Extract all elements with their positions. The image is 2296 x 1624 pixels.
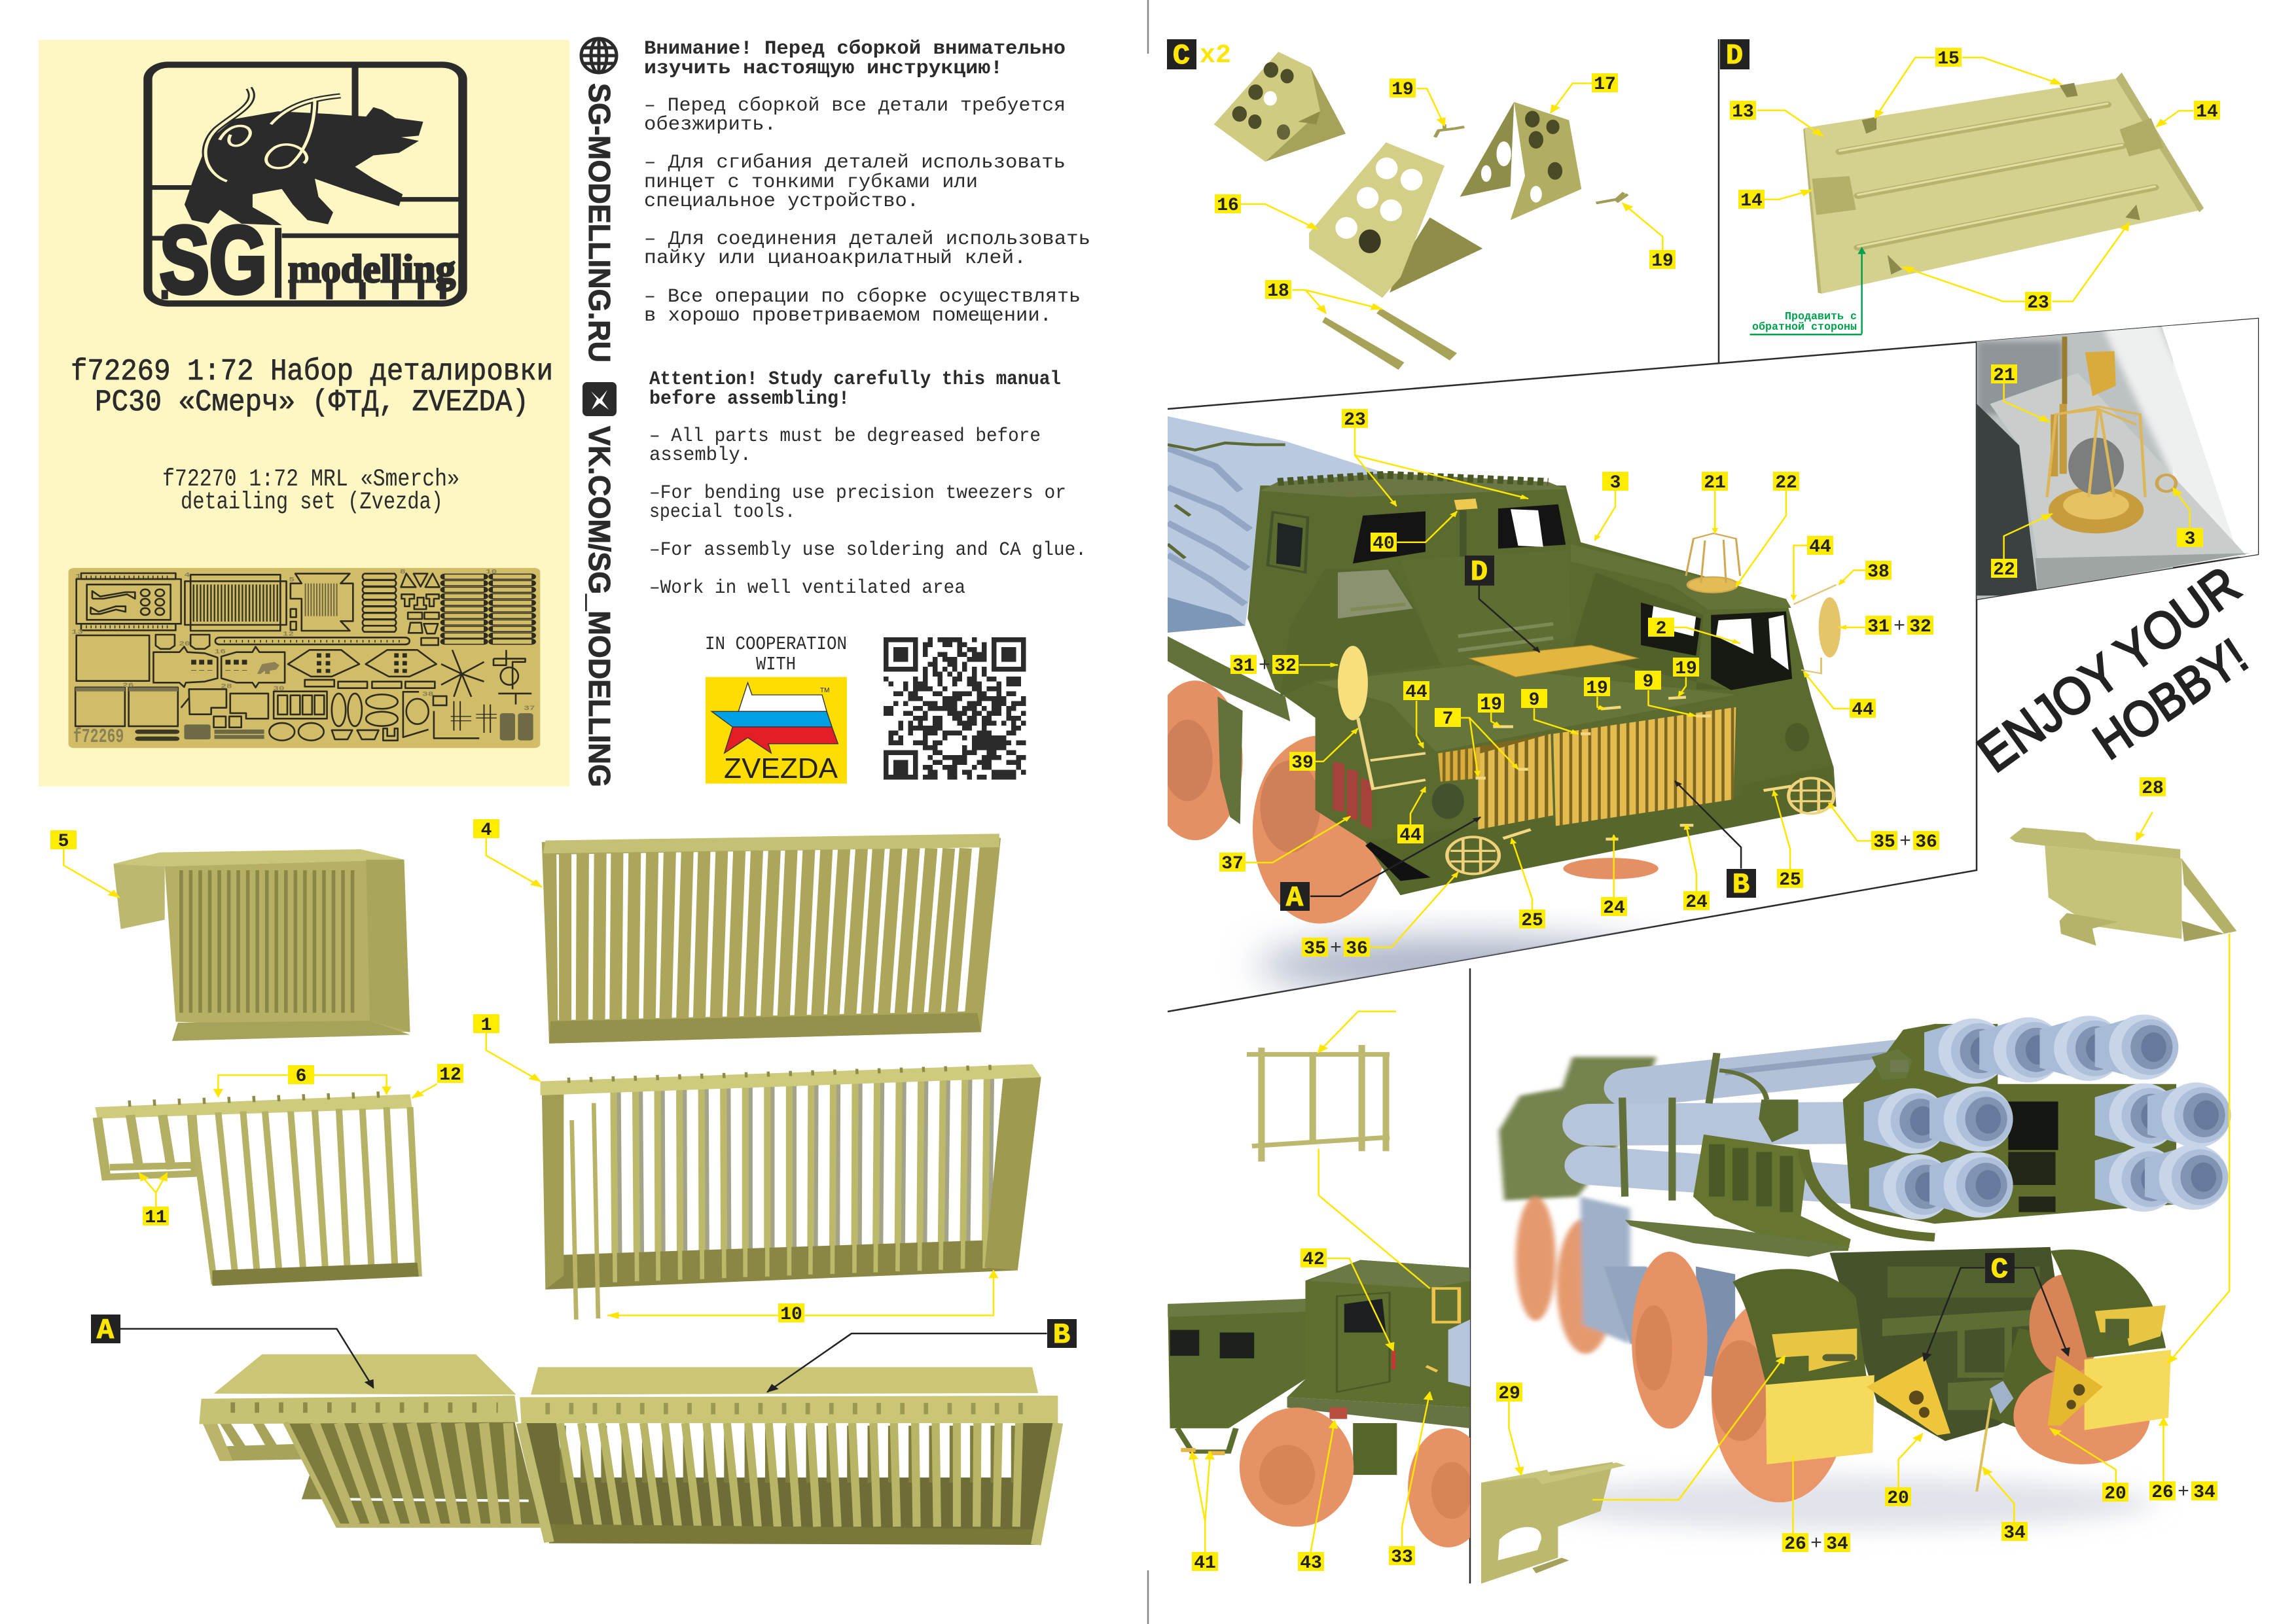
ladder and platform xyxy=(1625,1099,1935,1257)
label 44: 44 xyxy=(1852,700,1874,720)
part 29 xyxy=(1481,1462,1625,1583)
label 14: 14 xyxy=(2196,102,2218,122)
marker A on truck: A xyxy=(1286,882,1304,915)
part 1: outer frame xyxy=(541,1064,1041,1320)
title russian: f72269 1:72 Набор деталировки xyxy=(71,355,553,389)
label 26 + 34 right xyxy=(2149,1481,2217,1504)
photo-etched fret: f72269 xyxy=(73,726,124,749)
label 3 xyxy=(1602,472,1628,493)
cooperation caption: IN COOPERATION xyxy=(705,633,847,655)
lamp cage xyxy=(1686,533,1740,593)
logo: SG modelling sprue bear: modelling xyxy=(288,247,456,291)
text block: russian instructions: – Все операции по сборке осуществлять xyxy=(644,286,1081,308)
label 13: 13 xyxy=(1732,102,1754,122)
label 37: 37 xyxy=(1221,854,1244,874)
subtitle english: detailing set (Zvezda) xyxy=(181,489,443,516)
text block: russian instructions: изучить настоящую инструкцию! xyxy=(644,58,1003,80)
label 31 + 32 left: 32 xyxy=(1274,656,1297,677)
label 16: 16 xyxy=(1217,196,1239,216)
label 5 xyxy=(50,830,77,852)
photo-etched fret: 28 xyxy=(221,683,232,690)
label 42: 42 xyxy=(1302,1250,1325,1270)
label 35 + 36 right: 35 xyxy=(1873,832,1895,853)
label 25: 25 xyxy=(1779,870,1801,891)
photo-etched fret: 5 xyxy=(289,576,295,584)
note: push from the back xyxy=(1752,311,1857,334)
callouts: side truck xyxy=(1192,1012,1430,1553)
icon: globe xyxy=(581,39,617,73)
part 18 rails xyxy=(1322,308,1457,370)
photo-etched fret: 13 xyxy=(71,628,83,636)
launcher frame xyxy=(1843,1024,2176,1224)
label 44: 44 xyxy=(1809,537,1831,557)
marker B on truck: B xyxy=(1732,869,1749,902)
panel: rear truck photo xyxy=(1499,1015,2231,1530)
label 14: 14 xyxy=(1740,191,1763,211)
label 44: 44 xyxy=(1405,682,1427,703)
hood and front cab body xyxy=(1280,544,1837,895)
label 21: 21 xyxy=(1993,366,2015,386)
label 19: 19 xyxy=(1391,80,1414,100)
photo-etched fret: 16 xyxy=(215,648,226,656)
photo-etched fret: 12 xyxy=(283,631,294,638)
label 34: 34 xyxy=(2003,1523,2026,1544)
label 6 xyxy=(288,1065,314,1087)
label 35 + 36 right: + xyxy=(1899,831,1911,853)
cooperation caption xyxy=(705,633,847,675)
photo-etched fret: 26 xyxy=(122,682,134,689)
marker C xyxy=(1167,39,1196,73)
panel: loose parts 28 and 29 with callouts xyxy=(1481,812,2236,1583)
label 9 xyxy=(1635,671,1661,692)
label 6: 6 xyxy=(296,1067,306,1087)
tow hook and chain xyxy=(1977,1381,2013,1492)
photo-etched fret: 10 xyxy=(486,569,497,576)
callouts: front truck xyxy=(1245,428,1873,947)
chassis deck and strut xyxy=(1168,636,1290,824)
panel: cover with logo, title and fret xyxy=(39,40,569,786)
label 26 + 34 left: 34 xyxy=(1826,1534,1848,1555)
label 23: 23 xyxy=(2027,293,2049,313)
label 3 xyxy=(2177,528,2203,550)
qr code xyxy=(884,640,1026,777)
fenders xyxy=(1732,1250,2166,1386)
marker C on truck xyxy=(1985,1253,2015,1286)
photo-etched fret xyxy=(69,568,540,749)
part 28 xyxy=(2010,828,2236,945)
small PE details xyxy=(1475,697,1791,839)
label 1: 1 xyxy=(481,1015,492,1036)
label 9 xyxy=(1521,689,1547,711)
part 19 small right xyxy=(1596,192,1628,203)
zvezda logo: TM xyxy=(820,687,829,694)
zvezda logo xyxy=(706,677,847,785)
text block: english instructions: –For bending use precision tweezers or xyxy=(649,482,1066,504)
label 18: 18 xyxy=(1267,281,1289,302)
label 26 + 34 right: + xyxy=(2178,1481,2189,1504)
label 41: 41 xyxy=(1194,1553,1216,1574)
side cab xyxy=(1168,1260,1470,1475)
label 11: 11 xyxy=(145,1208,167,1228)
label 44: 44 xyxy=(1399,826,1422,846)
label 24: 24 xyxy=(1603,898,1625,919)
slogan: enjoy your hobby: ENJOY YOUR xyxy=(1967,555,2250,783)
label 26 + 34 left: 26 xyxy=(1784,1534,1806,1555)
red vents xyxy=(1333,762,1372,830)
part 4: front radiator grille xyxy=(542,834,1001,1044)
text block: english instructions xyxy=(649,368,1086,599)
label 25: 25 xyxy=(1521,911,1543,931)
text block: english instructions: –For assembly use soldering and CA glue. xyxy=(649,539,1086,561)
text block: english instructions: special tools. xyxy=(649,501,795,523)
text block: russian instructions: в хорошо проветриваемом помещении. xyxy=(644,305,1052,327)
text block: russian instructions: пайку или цианоакрилатный клей. xyxy=(644,247,1026,270)
callouts: C and D xyxy=(1241,58,2193,313)
part 19 small xyxy=(1435,124,1464,137)
note: push from the back: обратной стороны xyxy=(1752,321,1857,334)
truck silhouette base xyxy=(1247,485,1837,895)
panel: C and D parts xyxy=(1214,52,2204,370)
marker A xyxy=(91,1315,120,1347)
cooperation caption: WITH xyxy=(756,654,796,675)
part 6: side frame xyxy=(95,1094,419,1286)
logo: SG modelling sprue bear xyxy=(148,65,463,313)
panel: left side truck photo xyxy=(1168,1012,1488,1553)
label 9: 9 xyxy=(1643,672,1653,692)
label 38: 38 xyxy=(1867,562,1890,582)
label 3: 3 xyxy=(1610,473,1621,493)
marker D on truck xyxy=(1465,556,1494,589)
gold triangles xyxy=(1867,1356,2103,1436)
label 35 + 36 right xyxy=(1871,831,1939,853)
plate D on hood xyxy=(1469,645,1638,677)
subtitle english: f72270 1:72 MRL «Smerch» xyxy=(162,466,459,493)
label 29: 29 xyxy=(1498,1384,1520,1404)
panel: radiator parts assembly page xyxy=(63,834,1058,1545)
label 19: 19 xyxy=(1480,695,1502,715)
label 31 + 32 right: + xyxy=(1893,616,1905,638)
label 26 + 34 right: 34 xyxy=(2193,1483,2215,1503)
assembly A xyxy=(199,1354,541,1526)
zvezda logo: ZVEZDA xyxy=(724,752,838,785)
text block: russian instructions: Внимание! Перед сборкой внимательно xyxy=(644,38,1066,60)
marker A: A xyxy=(97,1315,115,1347)
label 24: 24 xyxy=(1685,892,1708,913)
callouts: rear truck xyxy=(1509,812,2229,1534)
text block: russian instructions: – Для сгибания деталей использовать xyxy=(644,152,1066,174)
label 3: 3 xyxy=(2185,529,2195,550)
gold mudflaps and plates xyxy=(1766,1305,2171,1464)
part 16 xyxy=(1309,143,1482,298)
assembly B xyxy=(520,1367,1058,1545)
label 4 xyxy=(473,819,499,841)
label 26 + 34 left: + xyxy=(1810,1533,1822,1555)
mirrors and arms xyxy=(1338,585,1840,788)
green note xyxy=(1749,247,1862,334)
part 30 rack xyxy=(1247,1045,1390,1161)
label 26 + 34 right: 26 xyxy=(2151,1483,2174,1503)
rocket tubes xyxy=(1591,1053,1919,1201)
marker C on truck: C xyxy=(1991,1254,2008,1286)
text block: russian instructions: – Перед сборкой все детали требуется xyxy=(644,95,1066,117)
photo-etched fret: 37 xyxy=(524,705,535,712)
text block: russian instructions: специальное устройство. xyxy=(644,190,919,213)
label 22: 22 xyxy=(1775,473,1797,493)
part D plate xyxy=(1803,73,2204,294)
rear wheels xyxy=(1147,680,1659,923)
label 43: 43 xyxy=(1300,1553,1322,1574)
photo-etched fret: 20 xyxy=(179,641,190,648)
logo: SG modelling sprue bear: SG xyxy=(160,207,267,313)
label 19: 19 xyxy=(1675,659,1697,679)
label 7 xyxy=(1435,708,1461,730)
label 31 + 32 right xyxy=(1865,616,1933,638)
distant cab and far wheels, blurred xyxy=(1499,1057,1657,1354)
photo-etched fret: 30 xyxy=(273,685,285,692)
text block: russian instructions xyxy=(644,38,1090,327)
label 21: 21 xyxy=(1704,473,1726,493)
label 31 + 32 right: 31 xyxy=(1867,617,1890,637)
text block: english instructions: – All parts must be degreased before xyxy=(649,425,1041,448)
marker D xyxy=(1720,39,1749,73)
marker D on truck: D xyxy=(1471,556,1488,589)
label 39: 39 xyxy=(1291,753,1314,773)
page fold marks and frame lines xyxy=(1148,0,2258,1624)
label 1 xyxy=(473,1014,499,1036)
wheels rear xyxy=(1632,1252,2150,1502)
label 35 + 36 left: 35 xyxy=(1304,939,1326,959)
photo-etched fret: 38 xyxy=(422,690,433,698)
label 5: 5 xyxy=(58,832,69,852)
text block: english instructions: before assembling! xyxy=(649,388,850,410)
label 31 + 32 left xyxy=(1230,655,1299,677)
label 7: 7 xyxy=(1443,709,1453,730)
marker A on truck xyxy=(1280,882,1310,915)
grille B xyxy=(1553,707,1736,826)
title russian: РС30 «Смерч» (ФТД, ZVEZDA) xyxy=(95,385,529,419)
slogan: enjoy your hobby: HOBBY! xyxy=(2084,628,2257,770)
label 33: 33 xyxy=(1391,1547,1413,1568)
label 20: 20 xyxy=(2104,1484,2126,1504)
label 9: 9 xyxy=(1529,690,1539,711)
label 35 + 36 left: 36 xyxy=(1346,939,1368,959)
label 22: 22 xyxy=(1993,560,2015,580)
label 19: 19 xyxy=(1586,679,1608,699)
label 17: 17 xyxy=(1594,75,1616,95)
label 19: 19 xyxy=(1651,251,1674,272)
text block: english instructions: Attention! Study carefully this manual xyxy=(649,368,1061,391)
rockets behind cab xyxy=(1168,416,1386,633)
subtitle english xyxy=(162,466,459,516)
rear cab xyxy=(1260,473,1566,573)
marker C: C xyxy=(1173,40,1190,73)
headlight meshes xyxy=(1447,778,1834,874)
heading: x2: x2 xyxy=(1200,41,1231,71)
photo-etched fret: 1 xyxy=(75,573,81,580)
label 10: 10 xyxy=(780,1305,802,1325)
label 4: 4 xyxy=(481,821,492,841)
label 2: 2 xyxy=(1656,619,1666,639)
photo-etched fret: 8 xyxy=(400,569,406,576)
part 5: small box xyxy=(113,849,410,1041)
marker B: B xyxy=(1053,1319,1070,1352)
label 20: 20 xyxy=(1887,1489,1909,1509)
vk vertical text: VK.COM/SG_MODELLING xyxy=(583,426,617,787)
chassis and rear xyxy=(1604,1247,2072,1441)
label 26 + 34 left xyxy=(1782,1533,1850,1555)
text block: russian instructions: – Для соединения деталей использовать xyxy=(644,228,1090,251)
label 28: 28 xyxy=(2142,779,2164,799)
marker B on truck xyxy=(1727,869,1756,902)
marker B xyxy=(1047,1319,1077,1352)
photo-etched fret: 4 xyxy=(184,572,190,579)
label 40: 40 xyxy=(1372,534,1395,554)
label 2 xyxy=(1648,618,1674,639)
label 35 + 36 left xyxy=(1302,938,1370,960)
label 35 + 36 left: + xyxy=(1330,938,1342,960)
label 23: 23 xyxy=(1344,410,1366,431)
rocket heads xyxy=(1864,1015,2231,1220)
text block: russian instructions: пинцет с тонкими губками или xyxy=(644,171,978,194)
part 17 xyxy=(1460,102,1581,220)
icon: vk xyxy=(583,382,617,416)
label 15: 15 xyxy=(1937,49,1960,69)
panel: front truck photo xyxy=(1147,416,1873,993)
label 31 + 32 left: 31 xyxy=(1232,656,1255,677)
part C assembled wedge xyxy=(1214,52,1346,162)
marker D: D xyxy=(1726,40,1743,73)
text block: english instructions: assembly. xyxy=(649,444,751,467)
label 31 + 32 right: 32 xyxy=(1909,617,1931,637)
text block: russian instructions: обезжирить. xyxy=(644,114,776,136)
label 31 + 32 left: + xyxy=(1259,655,1270,677)
grille A xyxy=(1438,733,1553,830)
text block: english instructions: –Work in well ventilated area xyxy=(649,577,965,599)
side wheels xyxy=(1240,1407,1488,1547)
label 12: 12 xyxy=(439,1065,461,1086)
note: push from the back: Продавить с xyxy=(1785,311,1857,323)
website vertical text: SG-MODELLING.RU xyxy=(583,83,617,362)
callouts: radiator parts xyxy=(63,838,1047,1392)
label 35 + 36 right: 36 xyxy=(1915,832,1937,853)
title russian xyxy=(71,355,553,419)
panel: inset photo of lamp xyxy=(1977,316,2261,601)
